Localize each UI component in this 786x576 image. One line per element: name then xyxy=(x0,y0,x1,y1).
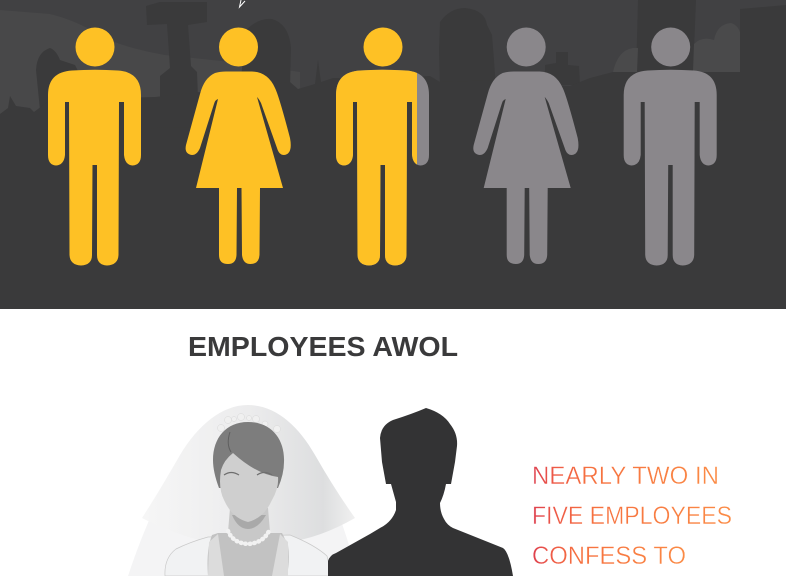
figure: woman yellow xyxy=(186,28,291,264)
pillar gravestone xyxy=(636,0,696,75)
gravestone: rounded xyxy=(240,19,291,88)
tiara xyxy=(218,414,280,432)
veil front layer xyxy=(142,405,355,542)
hair sweep line xyxy=(228,432,231,452)
neck xyxy=(228,508,270,546)
callout text: CONFESS TO xyxy=(532,542,686,570)
celtic cross gravestone xyxy=(146,2,207,97)
illustration: groom silhouette xyxy=(328,408,513,576)
neckline xyxy=(208,533,289,576)
light distant hill xyxy=(0,10,300,115)
light small stones xyxy=(613,23,742,72)
figure: man yellow xyxy=(48,28,141,266)
ground and grass xyxy=(0,60,786,130)
face xyxy=(220,453,278,522)
veil back layer xyxy=(128,406,358,576)
small cross gravestone xyxy=(545,52,580,85)
gravestone: left xyxy=(36,48,90,110)
necklace xyxy=(228,531,269,544)
heading: EMPLOYEES AWOL xyxy=(188,331,458,362)
callout text: FIVE EMPLOYEES xyxy=(532,502,732,530)
dark block stone xyxy=(740,5,786,80)
chin shadow xyxy=(232,515,266,529)
hair xyxy=(213,422,284,488)
white speech tip xyxy=(240,0,245,7)
jacket xyxy=(165,535,332,576)
figure: man grey xyxy=(624,28,717,266)
lace trim xyxy=(208,534,288,576)
dark graveyard panel xyxy=(0,0,786,309)
figure: man part yellow part grey xyxy=(336,28,429,266)
illustration: bride xyxy=(128,405,358,576)
callout text: NEARLY TWO IN xyxy=(532,462,719,490)
gravestone: tall rounded xyxy=(439,8,496,90)
callout text xyxy=(532,462,732,570)
figure: woman grey xyxy=(473,28,578,264)
eyebrows xyxy=(224,472,272,475)
